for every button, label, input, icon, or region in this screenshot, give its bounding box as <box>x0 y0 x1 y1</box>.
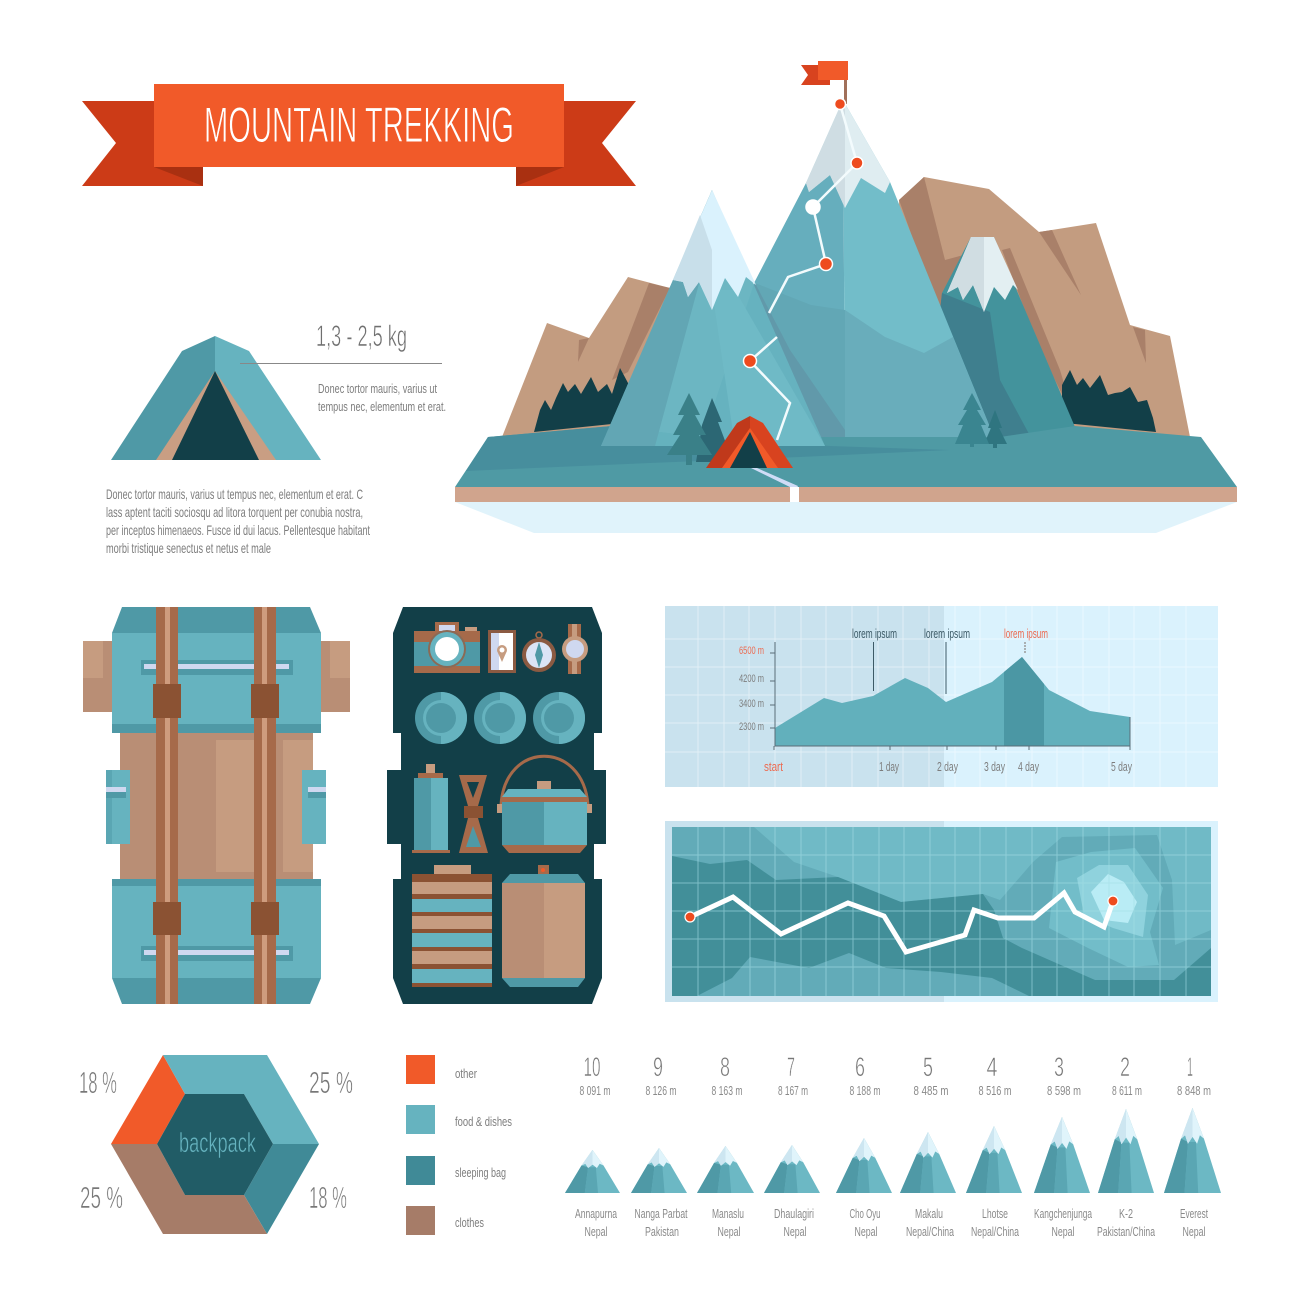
icon: striped sleeping bag <box>412 865 492 987</box>
rank 2 K-2: Pakistan/China <box>1097 1224 1156 1239</box>
straps <box>156 607 276 1004</box>
backpack contents panel <box>387 607 606 1004</box>
rank 10 Annapurna: Annapurna <box>575 1206 617 1221</box>
map dark band <box>672 856 1211 996</box>
trees left <box>667 393 728 465</box>
tent weight callout: Donec tortor mauris, varius ut <box>318 381 437 396</box>
icon: flask <box>412 764 450 853</box>
axes <box>770 642 1130 750</box>
rank 2 K-2: 2 <box>1120 1052 1130 1082</box>
side rolls <box>83 641 350 712</box>
rank 6 Cho Oyu <box>836 1052 892 1239</box>
markers <box>874 642 946 694</box>
labels: 2 day <box>937 759 958 774</box>
labels: lorem ipsum <box>924 626 970 641</box>
bottom compartment <box>112 879 321 1004</box>
rank 3 Kangchenjunga <box>1034 1052 1092 1239</box>
elevation chart panel <box>665 606 1218 787</box>
trees right <box>955 393 1007 448</box>
labels: 5 day <box>1111 759 1132 774</box>
rank 9 Nanga Parbat <box>631 1052 688 1239</box>
backpack front <box>83 607 350 1004</box>
rank 10 Annapurna <box>565 1052 620 1239</box>
rank 8 Manaslu: 8 163 m <box>712 1083 742 1098</box>
labels: 6500 m <box>739 645 764 657</box>
percent labels: 18 % <box>79 1065 117 1100</box>
icon: plate 3 <box>533 692 585 744</box>
mountain ranking <box>565 1052 1221 1239</box>
backpack hexagon chart <box>111 1055 319 1234</box>
rank 3 Kangchenjunga: 3 <box>1054 1052 1064 1082</box>
legend: sleeping bag <box>455 1165 506 1180</box>
rank 6 Cho Oyu: Nepal <box>854 1224 878 1239</box>
rank 8 Manaslu: 8 <box>720 1052 730 1082</box>
map route <box>690 893 1113 952</box>
icon: compass <box>522 632 556 672</box>
legend: other <box>455 1066 477 1081</box>
labels: lorem ipsum <box>1004 626 1048 641</box>
dark forest left <box>534 368 640 432</box>
rank 9 Nanga Parbat: 8 126 m <box>646 1083 676 1098</box>
area <box>775 657 1130 746</box>
icon: camera <box>414 622 480 673</box>
start point <box>685 912 695 922</box>
labels: lorem ipsum <box>852 626 897 641</box>
rank 10 Annapurna: Nepal <box>584 1224 608 1239</box>
route line <box>750 104 857 440</box>
rank 5 Makalu: 5 <box>923 1052 933 1082</box>
title banner: MOUNTAIN TREKKING <box>204 97 514 153</box>
dark forest right <box>1062 370 1156 432</box>
rank 5 Makalu: 8 485 m <box>914 1083 948 1098</box>
icon: plate 2 <box>474 692 526 744</box>
left rock <box>502 277 670 437</box>
rank 6 Cho Oyu: Cho Oyu <box>850 1206 880 1221</box>
rank 2 K-2: 8 611 m <box>1112 1083 1142 1098</box>
rank 4 Lhotse: 4 <box>986 1052 998 1082</box>
rank 9 Nanga Parbat: Pakistan <box>645 1224 679 1239</box>
rank 2 K-2: K-2 <box>1119 1206 1133 1221</box>
percent labels: 25 % <box>80 1180 123 1215</box>
icon: cutlery <box>459 775 488 853</box>
rank 4 Lhotse: Lhotse <box>982 1206 1008 1221</box>
rank 3 Kangchenjunga: 8 598 m <box>1047 1083 1081 1098</box>
legend: food & dishes <box>455 1114 512 1129</box>
rank 5 Makalu <box>900 1052 956 1239</box>
percent labels <box>79 1065 353 1215</box>
rank 7 Dhaulagiri: 7 <box>787 1052 795 1082</box>
rank 1 Everest: Everest <box>1180 1206 1208 1221</box>
river <box>751 468 799 502</box>
rank 7 Dhaulagiri: Nepal <box>784 1224 807 1239</box>
rank 7 Dhaulagiri: Dhaulagiri <box>774 1206 814 1221</box>
rank 3 Kangchenjunga: Kangchenjunga <box>1034 1206 1092 1221</box>
rank 7 Dhaulagiri: 8 167 m <box>778 1083 808 1098</box>
backpack hexagon chart: backpack <box>179 1127 257 1158</box>
legend <box>406 1055 512 1235</box>
rank 9 Nanga Parbat: 9 <box>653 1052 663 1082</box>
ground <box>455 426 1237 533</box>
rank 3 Kangchenjunga: Nepal <box>1052 1224 1075 1239</box>
end point <box>1108 896 1118 906</box>
rank 5 Makalu: Makalu <box>915 1206 943 1221</box>
rank 1 Everest <box>1164 1052 1221 1239</box>
tent weight callout: tempus nec, elementum et erat. <box>318 399 446 414</box>
top compartment <box>112 607 321 733</box>
text block <box>106 486 370 556</box>
text block: morbi tristique senectus et netus et male <box>106 540 271 556</box>
right mountain <box>925 237 1075 445</box>
rank 4 Lhotse <box>966 1052 1022 1239</box>
route map panel <box>665 821 1218 1002</box>
rank 8 Manaslu <box>697 1052 754 1239</box>
central mountain <box>700 100 994 447</box>
percent labels: 18 % <box>309 1180 347 1215</box>
percent labels: 25 % <box>309 1065 353 1100</box>
rank 6 Cho Oyu: 6 <box>855 1052 865 1082</box>
title banner <box>82 84 636 186</box>
legend: clothes <box>455 1215 484 1230</box>
labels: 2300 m <box>739 721 764 733</box>
labels: 1 day <box>879 759 899 774</box>
text block: per inceptos himenaeos. Fusce id dui lacus. Pellentesque habitant <box>106 522 370 538</box>
labels <box>739 626 1132 774</box>
text block: lass aptent taciti sociosqu ad litora torquent per conubia nostra, <box>106 504 363 520</box>
rank 1 Everest: Nepal <box>1182 1224 1206 1239</box>
icon: watch <box>562 624 588 674</box>
text block: Donec tortor mauris, varius ut tempus nec, elementum et erat. C <box>106 486 363 502</box>
icon: pot <box>497 756 592 853</box>
rank 1 Everest: 8 848 m <box>1177 1083 1211 1098</box>
body <box>120 733 313 879</box>
rank 6 Cho Oyu: 8 188 m <box>850 1083 880 1098</box>
icon: bottle <box>502 865 585 987</box>
route waypoints <box>744 98 863 368</box>
icon: plate 1 <box>415 692 467 744</box>
labels: start <box>764 759 783 774</box>
icon: map <box>488 630 516 673</box>
labels: 3400 m <box>739 698 764 710</box>
side pockets <box>106 770 326 844</box>
rank 4 Lhotse: Nepal/China <box>971 1224 1020 1239</box>
buckles <box>153 684 279 935</box>
map mid contour <box>672 827 1211 996</box>
icon: small tent <box>111 336 321 460</box>
rank 2 K-2 <box>1097 1052 1156 1239</box>
rank 4 Lhotse: 8 516 m <box>978 1083 1012 1098</box>
rank 7 Dhaulagiri <box>764 1052 820 1239</box>
mountain scene <box>455 61 1237 533</box>
labels: 4200 m <box>739 673 764 685</box>
labels: 3 day <box>984 759 1005 774</box>
labels: 4 day <box>1018 759 1039 774</box>
rank 5 Makalu: Nepal/China <box>906 1224 955 1239</box>
rank 10 Annapurna: 8 091 m <box>580 1083 610 1098</box>
tent weight callout <box>240 320 446 414</box>
right rock <box>899 177 1190 437</box>
tent weight callout: 1,3 - 2,5 kg <box>316 320 407 353</box>
rank 1 Everest: 1 <box>1187 1052 1193 1082</box>
left mountain <box>601 190 825 446</box>
rank 8 Manaslu: Manaslu <box>712 1206 744 1221</box>
peak band <box>1004 657 1044 746</box>
rank 9 Nanga Parbat: Nanga Parbat <box>634 1206 688 1221</box>
rank 10 Annapurna: 10 <box>584 1052 600 1082</box>
tent red <box>706 416 793 468</box>
summit contours <box>1049 848 1163 967</box>
flag <box>801 61 848 104</box>
rank 8 Manaslu: Nepal <box>718 1224 741 1239</box>
